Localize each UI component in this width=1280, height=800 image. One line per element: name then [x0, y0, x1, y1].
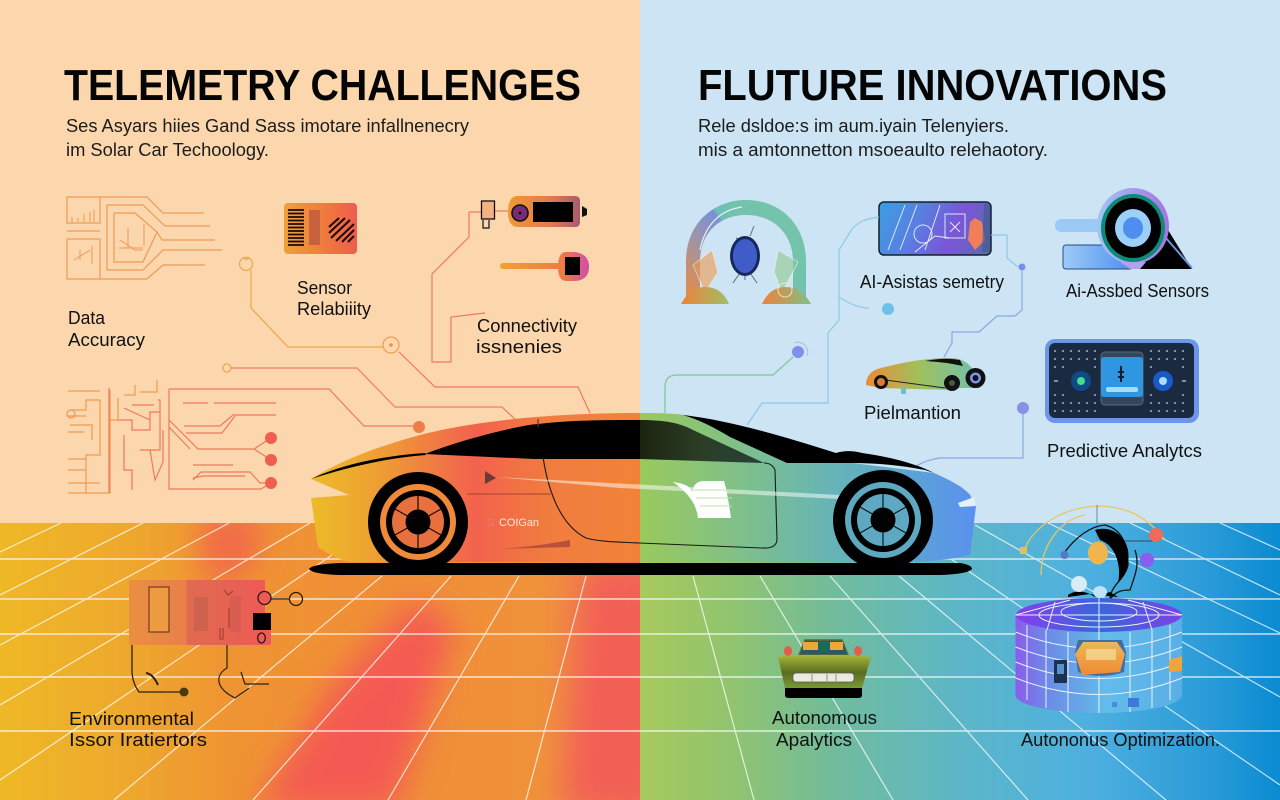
label: data accuracy: Data — [68, 307, 106, 328]
icon: predictive analytics dashboard — [1045, 339, 1199, 423]
label: sensor reliability: Sensor — [297, 277, 352, 298]
icon: autonomous car rear view — [778, 640, 871, 698]
icon: circuit board lower left — [67, 380, 425, 493]
label: data accuracy — [68, 307, 146, 350]
title: telemetry challenges: TELEMETRY CHALLENGES — [64, 61, 581, 110]
circuit trace: green node to car roof — [665, 342, 808, 413]
car window: warm — [425, 420, 640, 459]
floor: cool half — [640, 523, 1280, 800]
car body: cool half — [640, 413, 976, 562]
icon: connectivity device — [432, 196, 587, 362]
car roof silhouette — [683, 415, 934, 473]
floor: warm half — [0, 515, 660, 800]
panel: telemetry challenges background — [0, 0, 640, 524]
subtitle: future innovations: Rele dsldoe:s im aum.iyain Telenyiers. — [698, 115, 1009, 136]
label: autonomous analytics — [772, 707, 877, 750]
icon: sensor lens — [1055, 188, 1192, 269]
subtitle: telemetry challenges: im Solar Car Techoology. — [66, 139, 269, 160]
icon: environmental sensor box — [129, 580, 302, 698]
roof seam — [537, 419, 539, 427]
central car — [309, 413, 976, 575]
icon: sensor card — [284, 203, 357, 254]
nose light — [958, 497, 976, 507]
icon: probe sensor — [500, 252, 589, 281]
label: connectivity issues — [476, 315, 578, 357]
label: environmental sensor interactions — [69, 708, 207, 750]
label: sensor reliability: Relabiiity — [297, 298, 372, 319]
label: autonomous analytics: Apalytics — [776, 729, 852, 750]
side highlight streak — [496, 477, 840, 499]
label: sensor reliability — [297, 277, 372, 319]
icon: data cylinder — [1016, 598, 1182, 713]
side mirror marker — [485, 471, 496, 484]
icon: autonomous optimization orbit — [1020, 505, 1165, 600]
circuit trace: tablet to mini car — [944, 235, 1026, 357]
label: connectivity issues: Connectivity — [477, 315, 578, 336]
label: environmental sensor interactions: Environmental — [69, 708, 194, 729]
circuit trace: predictive node to car — [915, 402, 1029, 467]
circuit trace: node to car roof — [240, 257, 590, 413]
label: autonomous optimization: Autononus Optimization. — [1021, 729, 1220, 750]
hood edge line — [311, 453, 426, 479]
subtitle: future innovations — [698, 115, 1048, 160]
circuit trace: second node to car — [223, 364, 518, 422]
label: autonomous analytics: Autonomous — [772, 707, 877, 728]
circuit trace: tablet to car — [747, 217, 894, 425]
subtitle: future innovations: mis a amtonnetton msoeaulto relehaotory. — [698, 139, 1048, 160]
subtitle: telemetry challenges — [66, 115, 470, 160]
door handle light — [673, 481, 731, 518]
car window: cool — [640, 420, 764, 463]
rear wheel — [833, 470, 933, 570]
car body: warm half — [311, 413, 640, 562]
title: future innovations: FLUTURE INNOVATIONS — [698, 61, 1167, 110]
label: AI-assisted telemetry: AI-Asistas semetry — [860, 271, 1005, 292]
front wheel — [368, 472, 468, 572]
icon: mini car — [866, 358, 986, 394]
icon: headset arch — [681, 200, 811, 304]
car logo text: S — [487, 517, 494, 529]
panel: future innovations background — [640, 0, 1280, 524]
label: environmental sensor interactions: Issor Iratiertors — [69, 729, 207, 750]
subtitle: telemetry challenges: Ses Asyars hiies Gand Sass imotare infallnenecry — [66, 115, 470, 136]
label: data accuracy: Accuracy — [68, 329, 146, 350]
lower body crease — [501, 540, 570, 549]
label: implementation: Pielmantion — [864, 402, 961, 423]
icon: data accuracy circuit — [67, 197, 222, 279]
handle stripes — [692, 490, 732, 506]
icon: tablet dashboard — [879, 202, 991, 255]
label: AI-assisted sensors: Ai-Assbed Sensors — [1066, 280, 1209, 301]
car logo text: COIGan — [499, 517, 539, 529]
door outline — [543, 457, 777, 548]
car ground shadow — [309, 563, 972, 575]
floor grid lines — [0, 523, 1280, 800]
body sill — [467, 493, 552, 495]
label: connectivity issues: issnenies — [476, 336, 562, 357]
label: predictive analytics: Predictive Analytcs — [1047, 440, 1202, 461]
